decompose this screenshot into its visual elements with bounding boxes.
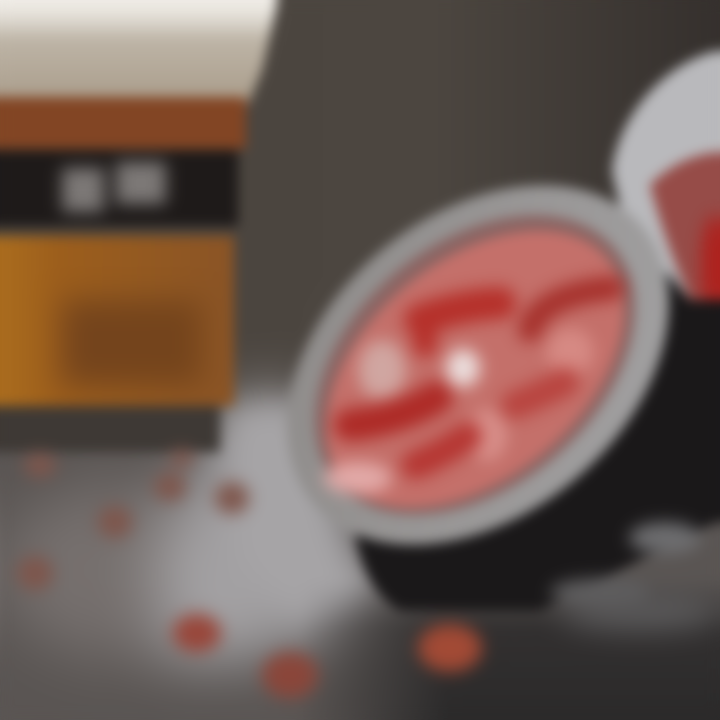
small bowl red center — [701, 215, 720, 315]
small bowl, top right — [612, 50, 720, 330]
orange label dark lettering block — [62, 300, 202, 385]
main sliced bowl — [217, 112, 720, 618]
faint red specks — [17, 449, 249, 590]
bowl dark body — [355, 270, 720, 610]
bowl inner shadow — [257, 155, 693, 575]
jar — [0, 0, 278, 452]
bowl pink interior — [274, 176, 676, 562]
body reflections — [629, 522, 701, 554]
jar black label band — [0, 150, 238, 226]
red slices — [350, 288, 612, 465]
pale pink patches — [324, 328, 594, 494]
small bowl interior — [650, 152, 720, 325]
small bowl rim — [612, 50, 720, 330]
bowl grey rim — [217, 112, 720, 618]
white center — [446, 349, 480, 387]
label lettering — [62, 162, 166, 212]
scattered red pieces on table — [173, 614, 482, 698]
jar lid — [0, 0, 278, 105]
jar base shadow — [0, 406, 220, 452]
jar orange label — [0, 236, 234, 406]
jar amber band — [0, 97, 246, 149]
table surface — [0, 395, 720, 720]
